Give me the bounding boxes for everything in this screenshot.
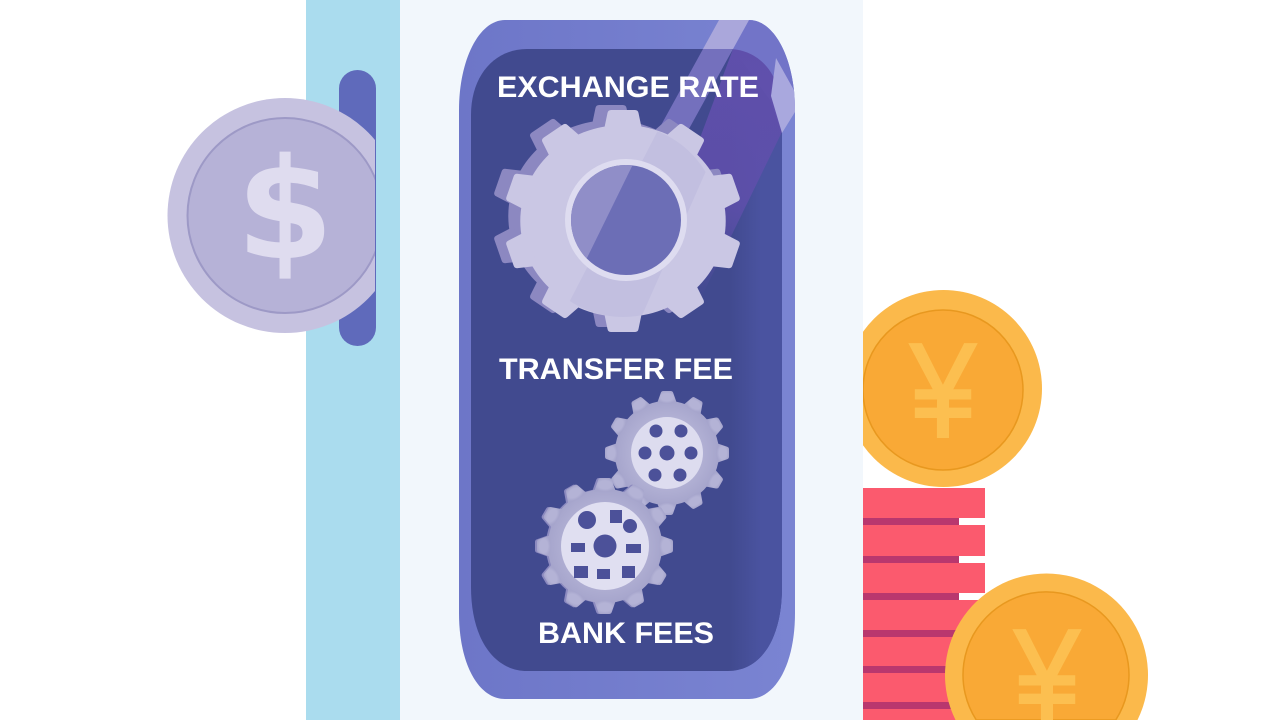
icon: dollar coin (168, 98, 375, 333)
panel: light blue strip (306, 0, 400, 720)
phone screen (471, 49, 782, 671)
icon: red coin stack (863, 488, 985, 720)
panel: pale background card (400, 0, 863, 720)
icon: large gear (494, 105, 740, 332)
heading: exchange rate: EXCHANGE RATE (497, 71, 759, 104)
icon: upper yen coin (845, 290, 1042, 487)
icon: small lower gear (535, 478, 673, 614)
heading: bank fees: BANK FEES (538, 617, 714, 650)
gear hole (565, 159, 687, 281)
panel: phone device (459, 20, 800, 699)
icon: small upper gear (605, 391, 729, 515)
dollar sign: $ (236, 129, 334, 292)
icon: lower yen coin (945, 574, 1148, 720)
icon: coin slot (339, 70, 376, 346)
heading: transfer fee: TRANSFER FEE (499, 353, 733, 386)
screen glare bands (662, 20, 795, 270)
